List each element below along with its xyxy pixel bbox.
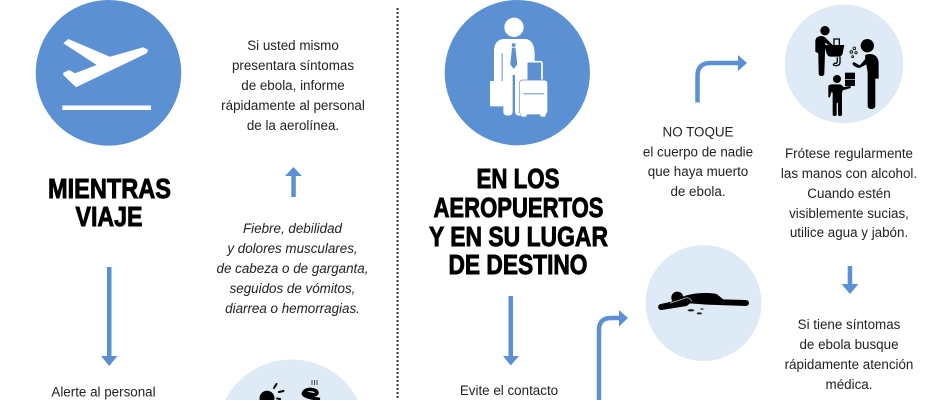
text: do not touch bbox=[643, 124, 753, 199]
arrow: down to avoid contact text bbox=[503, 296, 519, 366]
text: avoid contact: Evite el contacto bbox=[460, 383, 558, 398]
text: symptoms list: diarrea o hemorragias. bbox=[225, 301, 360, 316]
heading: mientras viaje: MIENTRAS bbox=[48, 173, 171, 204]
text: alert staff: Alerte al personal bbox=[51, 384, 156, 400]
text: symptoms list: seguidos de vómitos, bbox=[230, 281, 355, 296]
heading: mientras viaje bbox=[48, 173, 171, 232]
arrow: up to own symptoms text bbox=[285, 167, 302, 197]
text: own symptoms: rápidamente al personal bbox=[221, 98, 365, 113]
text: seek medical care: médica. bbox=[826, 377, 872, 392]
text: own symptoms: presentara síntomas bbox=[232, 58, 354, 73]
text: seek medical care: de ebola busque bbox=[799, 337, 899, 352]
text: own symptoms bbox=[221, 38, 365, 133]
text: symptoms list: de cabeza o de garganta, bbox=[217, 261, 368, 276]
heading: en los aeropuertos y en su lugar de destino: DE DESTINO bbox=[448, 249, 588, 280]
heading: en los aeropuertos y en su lugar de destino bbox=[429, 163, 608, 280]
text: symptoms list: y dolores musculares, bbox=[226, 241, 358, 256]
text: symptoms list: Fiebre, debilidad bbox=[243, 221, 343, 236]
icon: body on the ground bbox=[646, 245, 762, 361]
text: rub hands: utilice agua y jabón. bbox=[790, 225, 908, 240]
text: rub hands: Cuando estén bbox=[807, 186, 891, 201]
heading: en los aeropuertos y en su lugar de destino: AEROPUERTOS bbox=[434, 192, 604, 223]
text: seek medical care: rápidamente atención bbox=[785, 357, 913, 372]
text: own symptoms: Si usted mismo bbox=[247, 38, 339, 53]
text: seek medical care bbox=[785, 317, 913, 392]
arrow: elbow to handwashing icon bbox=[698, 55, 747, 102]
text: rub hands: visiblemente sucias, bbox=[789, 206, 909, 221]
icon: departing plane bbox=[36, 0, 181, 146]
icon: traveller with luggage bbox=[445, 0, 590, 145]
icon: sick people bbox=[225, 359, 358, 400]
heading: en los aeropuertos y en su lugar de destino: EN LOS bbox=[476, 163, 560, 194]
text: do not touch: de ebola. bbox=[670, 184, 726, 199]
text: do not touch: que haya muerto bbox=[648, 164, 748, 179]
text: symptoms list bbox=[217, 221, 368, 316]
text: do not touch: NO TOQUE bbox=[663, 124, 734, 140]
arrow: elbow to body icon bbox=[599, 310, 628, 400]
text: rub hands: las manos con alcohol. bbox=[781, 166, 917, 181]
icon: handwashing bbox=[785, 5, 903, 123]
text: own symptoms: de ebola, informe bbox=[241, 78, 345, 93]
text: rub hands: Frótese regularmente bbox=[785, 146, 913, 161]
arrow: down to seek care text bbox=[842, 266, 858, 294]
text: rub hands bbox=[781, 146, 917, 240]
text: own symptoms: de la aerolínea. bbox=[247, 118, 339, 133]
heading: en los aeropuertos y en su lugar de destino: Y EN SU LUGAR bbox=[429, 221, 608, 252]
arrow: down to alert text bbox=[101, 267, 118, 366]
text: seek medical care: Si tiene síntomas bbox=[798, 317, 901, 332]
text: do not touch: el cuerpo de nadie bbox=[643, 144, 753, 160]
heading: mientras viaje: VIAJE bbox=[76, 201, 142, 232]
